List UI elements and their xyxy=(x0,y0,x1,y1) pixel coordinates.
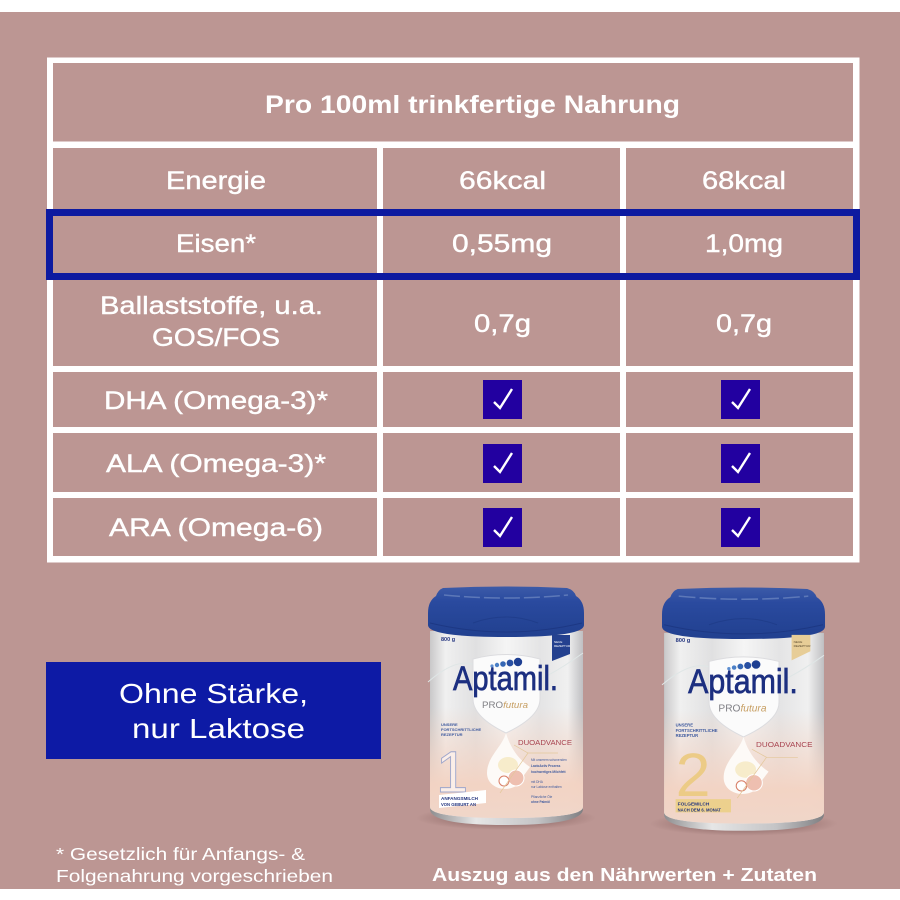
product: Aptamil 1 can: Pflanzliche Öle xyxy=(531,795,552,799)
product: Aptamil 1 can: ANFANGSMILCH xyxy=(441,796,479,801)
callout: Ohne Stärke, nur Laktose xyxy=(46,662,381,759)
product: Aptamil 2 can: Aptamil. xyxy=(688,662,798,701)
row: Energie: 66kcal xyxy=(459,167,546,195)
row: DHA xyxy=(104,380,760,419)
product: Aptamil 2 can: 800 g xyxy=(676,638,691,644)
product: Aptamil 2 can xyxy=(649,587,838,836)
row: Energie: Energie xyxy=(166,167,266,195)
product: Aptamil 1 can: ohne Palmöl xyxy=(531,800,550,804)
row: Eisen: Eisen* xyxy=(176,230,256,258)
product: Aptamil 1 can: REZEPTUR xyxy=(554,644,571,648)
table grid xyxy=(47,58,860,562)
footnote: * Gesetzlich für Anfangs- & xyxy=(56,844,305,864)
highlight frame: Eisen row xyxy=(50,212,856,276)
callout: Ohne Stärke, nur Laktose: nur Laktose xyxy=(132,713,305,744)
row: Ballaststoffe: 0,7g xyxy=(474,310,531,338)
footnote: Folgenahrung vorgeschrieben xyxy=(56,866,333,886)
product: Aptamil 1 can: DUOADVANCE xyxy=(518,738,572,747)
callout: Ohne Stärke, nur Laktose: Ohne Stärke, xyxy=(119,678,308,709)
product: Aptamil 1 can: LactoActiv Prozess xyxy=(531,764,561,768)
row: Eisen: 1,0mg xyxy=(705,230,783,258)
product: Aptamil 2 can: NACH DEM 6. MONAT xyxy=(678,807,721,812)
row: Energie: 68kcal xyxy=(702,167,786,195)
product: Aptamil 1 can: PROfutura xyxy=(482,700,528,711)
row: Eisen xyxy=(176,230,783,258)
row: Ballaststoffe: 0,7g xyxy=(716,310,772,338)
product: Aptamil 2 can: DUOADVANCE xyxy=(756,740,812,749)
comparison table xyxy=(47,58,860,562)
product: Aptamil 1 can: mit DHA xyxy=(531,780,544,784)
product: Aptamil 2 can: PROfutura xyxy=(718,704,767,714)
product: Aptamil 1 can: Aptamil. xyxy=(453,660,558,698)
product: Aptamil 2 can: 2 xyxy=(676,742,710,810)
row: Ballaststoffe xyxy=(100,292,772,352)
product: Aptamil 2 can: REZEPTUR xyxy=(794,644,811,648)
row: Energie xyxy=(166,167,786,195)
product: Aptamil 2 can: REZEPTUR xyxy=(676,733,698,738)
product: Aptamil 2 can: UNSERE xyxy=(676,723,693,728)
table heading: Pro 100ml trinkfertige Nahrung xyxy=(265,91,680,119)
footnote xyxy=(56,844,333,886)
row: Eisen: 0,55mg xyxy=(452,230,552,258)
row: ALA xyxy=(106,444,760,483)
product: Aptamil 1 can: 1 xyxy=(436,740,468,805)
product: Aptamil 1 can: 800 g xyxy=(441,637,455,643)
product: Aptamil 1 can: NEUE xyxy=(554,640,562,644)
product: Aptamil 1 can: nur Laktose enthalten xyxy=(531,785,562,789)
row: DHA: DHA (Omega-3)* xyxy=(104,387,328,415)
product: Aptamil 2 can: NEUE xyxy=(794,640,802,644)
row: ALA: ALA (Omega-3)* xyxy=(106,450,326,478)
caption: products: Auszug aus den Nährwerten + Zutaten xyxy=(432,865,817,885)
row: Ballaststoffe: Ballaststoffe, u.a. xyxy=(100,292,323,320)
product: Aptamil 1 can xyxy=(416,586,596,830)
product: Aptamil 1 can: FORTSCHRITTLICHE xyxy=(441,727,482,732)
product: Aptamil 1 can: REZEPTUR xyxy=(441,732,463,737)
product: Aptamil 1 can: VON GEBURT AN xyxy=(441,802,476,807)
product: Aptamil 1 can: Mit unserem schonenden xyxy=(531,758,567,762)
row: ARA xyxy=(109,508,760,547)
row: ARA: ARA (Omega-6) xyxy=(109,514,323,542)
row: Ballaststoffe: GOS/FOS xyxy=(152,324,280,352)
product: Aptamil 1 can: UNSERE xyxy=(441,722,458,727)
product: Aptamil 1 can: hochwertiges Milchfett xyxy=(531,770,566,774)
product: Aptamil 2 can: FOLGEMILCH xyxy=(678,801,710,807)
product: Aptamil 2 can: FORTSCHRITTLICHE xyxy=(676,728,718,733)
